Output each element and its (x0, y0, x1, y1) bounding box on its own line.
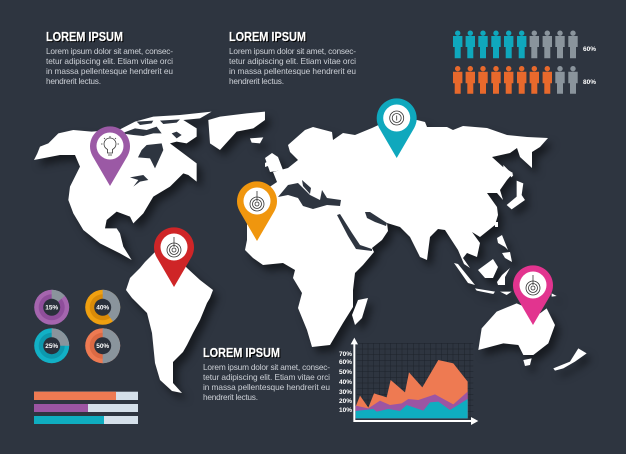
text block: top center: Lorem ipsum dolor sit amet, consec- (229, 46, 356, 56)
pin: pink target (513, 265, 553, 325)
text block: bottom center: in massa pellentesque hendrerit eu (203, 382, 330, 392)
progress bars (34, 392, 138, 424)
area chart: 20% (339, 398, 352, 405)
donut: 50% coral (85, 328, 120, 363)
text block: top left: LOREM IPSUM (46, 29, 123, 44)
text block: bottom center: hendrerit lectus. (203, 392, 258, 402)
text block: bottom center: tetur adipiscing elit. Etiam vitae orci (203, 372, 330, 382)
donut: 15% purple (34, 290, 69, 325)
pin: purple lightbulb (90, 126, 130, 186)
pin: teal coin (377, 98, 417, 158)
donut: 25% teal (34, 328, 69, 363)
area chart: 60% (339, 359, 352, 366)
text block: top center: in massa pellentesque hendrerit eu (229, 66, 356, 76)
pictogram: teal people 60%: 60% (583, 46, 596, 53)
text block: top center: hendrerit lectus. (229, 76, 284, 86)
pin: orange target (237, 181, 277, 241)
donut: 40% orange: 40% (96, 305, 109, 312)
text block: top left (46, 29, 173, 86)
text block: top left: Lorem ipsum dolor sit amet, consec- (46, 46, 173, 56)
text block: bottom center: Lorem ipsum dolor sit amet, consec- (203, 362, 330, 372)
area chart (339, 338, 478, 425)
North America (34, 112, 265, 260)
East Asia islands (503, 165, 525, 209)
donut: 25% teal: 25% (45, 343, 58, 350)
area chart: 50% (339, 369, 352, 376)
South America (126, 249, 213, 393)
area chart: 70% (339, 351, 352, 358)
text block: top left: tetur adipiscing elit. Etiam vitae orci (46, 56, 173, 66)
pictogram: teal people 60% (453, 30, 596, 58)
donut: 15% purple: 15% (45, 305, 58, 312)
pictogram: orange people 80% (453, 66, 596, 94)
area chart: 10% (339, 407, 352, 414)
area chart: 30% (339, 389, 352, 396)
Eurasia and Africa (245, 120, 548, 347)
world map (34, 112, 587, 393)
text block: top center: LOREM IPSUM (229, 29, 306, 44)
area chart: 40% (339, 379, 352, 386)
islands (265, 153, 512, 325)
text block: bottom center (203, 345, 330, 402)
text block: top center: tetur adipiscing elit. Etiam vitae orci (229, 56, 356, 66)
text block: top left: hendrerit lectus. (46, 76, 101, 86)
text block: top left: in massa pellentesque hendrerit eu (46, 66, 173, 76)
donut: 50% coral: 50% (96, 343, 109, 350)
text block: bottom center: LOREM IPSUM (203, 345, 280, 360)
donut: 40% orange (85, 290, 120, 325)
text block: top center (229, 29, 356, 86)
pin: red target (154, 227, 194, 287)
pictogram: orange people 80%: 80% (583, 79, 596, 86)
Mediterranean and inland seas (278, 180, 387, 251)
Australia and Oceania (475, 288, 587, 371)
